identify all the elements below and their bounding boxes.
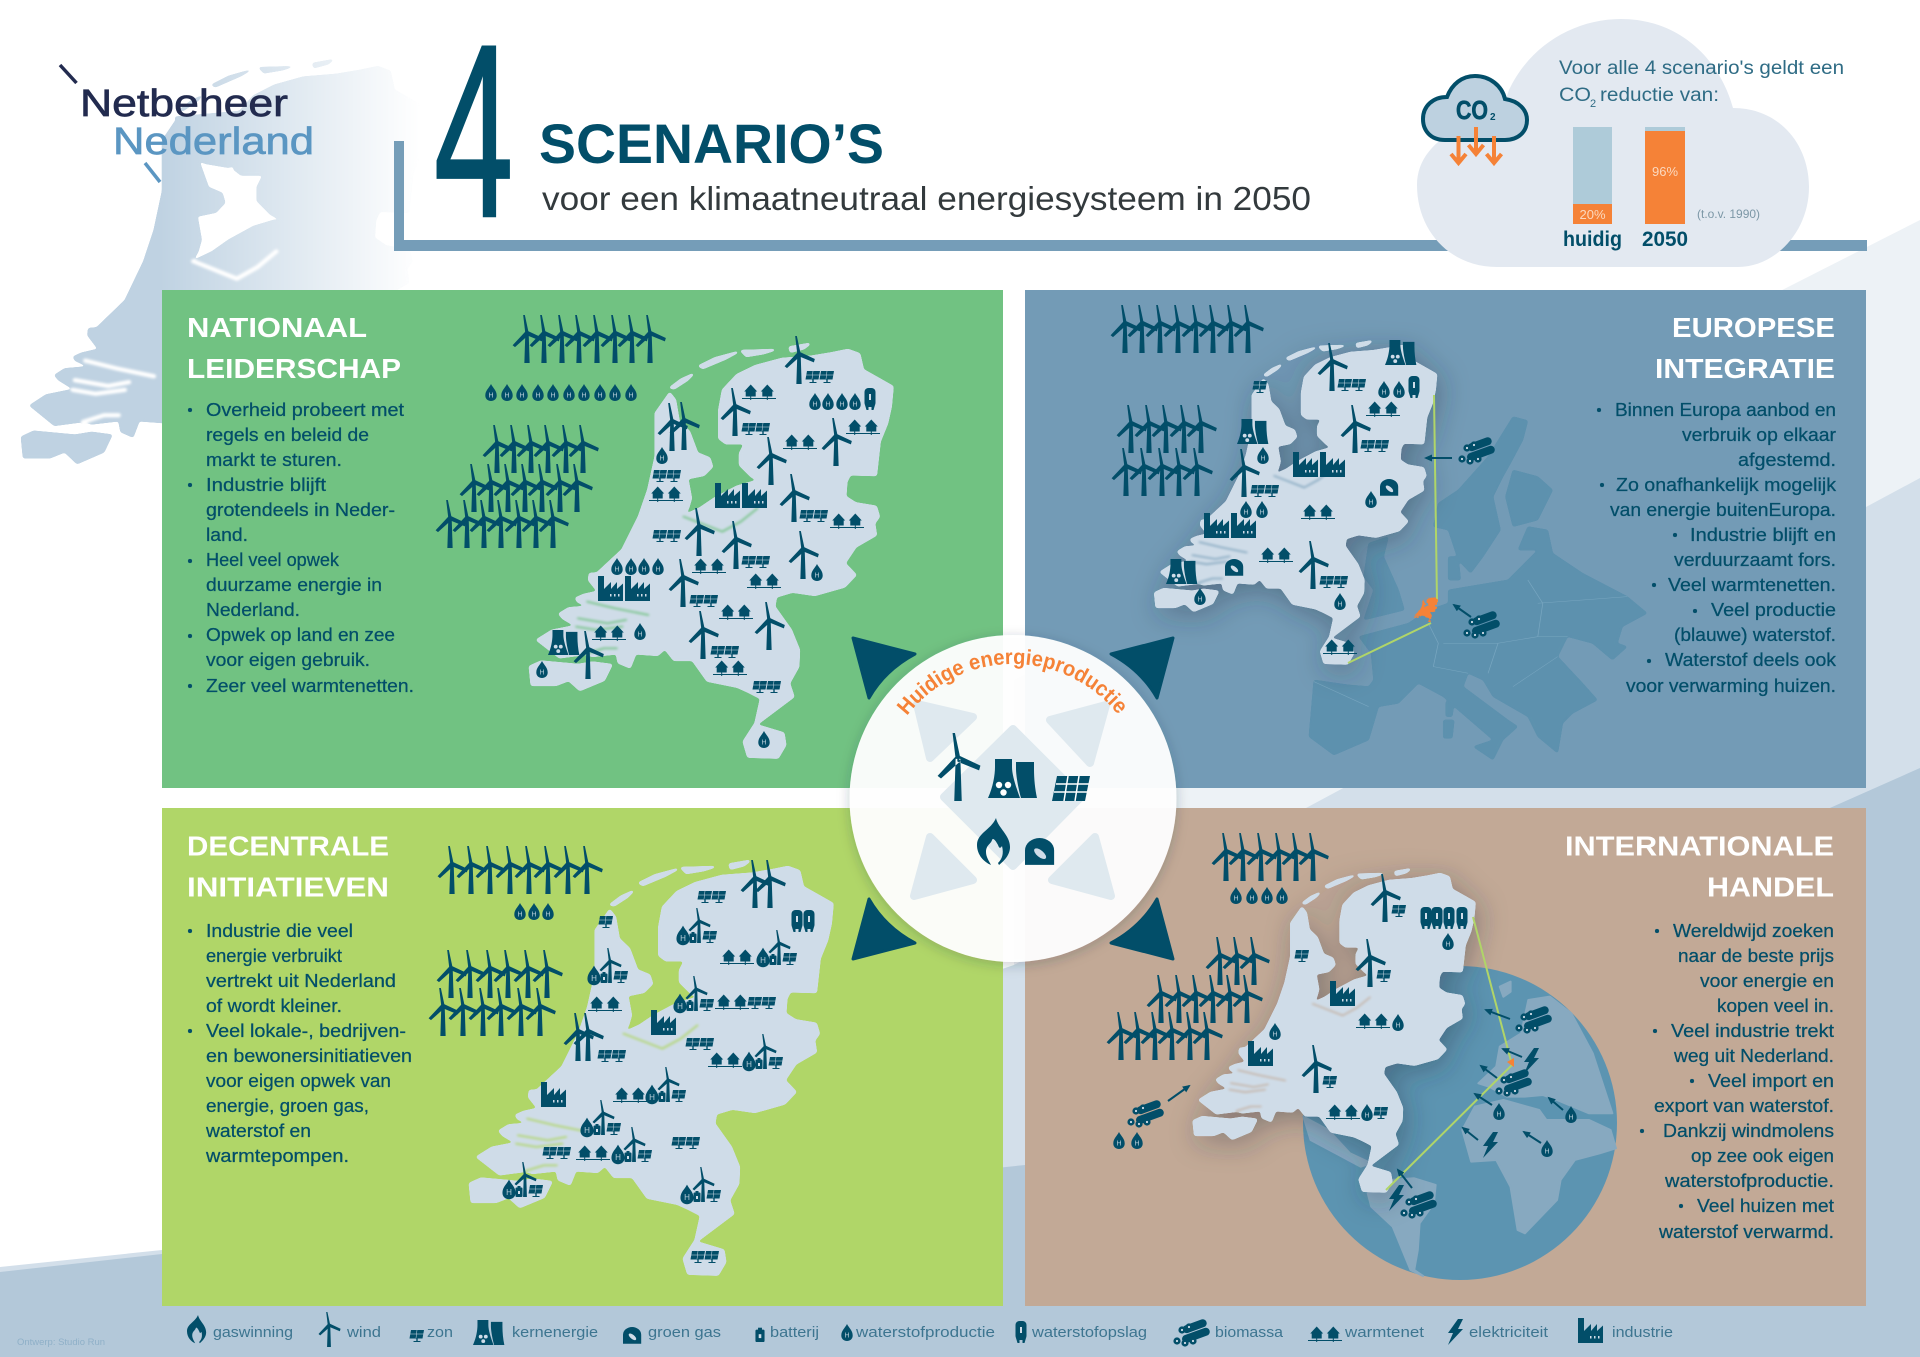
bullet list: verbruik op elkaar <box>1682 424 1836 445</box>
heading: INTERNATIONALE <box>1565 830 1834 862</box>
bullet list: export van waterstof. <box>1654 1095 1834 1116</box>
callout text: reductie van: <box>1600 85 1719 106</box>
icon: CO2 cloud with arrows: 2 <box>1490 112 1496 123</box>
bullet list: Veel lokale-, bedrijven- <box>206 1020 406 1041</box>
bullet list: Opwek op land en zee <box>206 624 395 645</box>
bullet list: Industrie blijft en <box>1690 524 1836 545</box>
interconnection lines and Netherlands marker <box>1348 395 1438 663</box>
heading <box>1565 830 1834 902</box>
legend: industrie: industrie <box>1612 1324 1673 1341</box>
corner arrows pointing to scenarios <box>853 638 1173 959</box>
legend: batterij <box>755 1324 819 1342</box>
offshore wind turbines <box>436 315 666 548</box>
bullet list <box>1597 399 1837 696</box>
bullet list: energie verbruikt <box>206 945 342 966</box>
bullet list: of wordt kleiner. <box>206 995 342 1016</box>
bullet list: Veel import en <box>1708 1070 1834 1091</box>
country borders <box>1314 580 1627 707</box>
bullet list: voor eigen gebruik. <box>206 649 370 670</box>
title: 4 <box>434 0 513 269</box>
map of Europe <box>1309 417 1647 760</box>
bar chart: CO2 reduction: 20% <box>1579 207 1606 222</box>
bullet list: verduurzaamt fors. <box>1674 549 1836 570</box>
bullet list: vertrekt uit Nederland <box>206 970 396 991</box>
bullet list: Veel industrie trekt <box>1671 1020 1834 1041</box>
heading <box>187 312 401 384</box>
panel: Internationale Handel <box>1025 808 1866 1306</box>
legend: waterstofopslag: waterstofopslag <box>1031 1324 1147 1341</box>
legend: zon: zon <box>427 1324 453 1341</box>
logo: Netbeheer Nederland: Netbeheer <box>80 83 288 125</box>
bullet list: naar de beste prijs <box>1678 945 1834 966</box>
bullet list: voor eigen opwek van <box>206 1070 391 1091</box>
heading: INTEGRATIE <box>1655 353 1835 384</box>
curved title: Huidige energieproductie <box>896 649 1125 715</box>
imports: biomass, electricity, hydrogen with arrows <box>1113 1005 1577 1219</box>
bullet list: voor verwarming huizen. <box>1626 675 1836 696</box>
map of the Netherlands <box>470 861 832 1275</box>
legend: waterstofproductie: waterstofproductie <box>855 1324 995 1341</box>
bullet list: op zee ook eigen <box>1691 1145 1834 1166</box>
panel: Europese Integratie <box>1025 290 1866 788</box>
legend: groen gas: groen gas <box>648 1324 721 1341</box>
bullet list: afgestemd. <box>1738 449 1836 470</box>
bullet list: regels en beleid de <box>206 424 369 445</box>
heading <box>187 830 389 902</box>
map of the Netherlands <box>1155 341 1436 664</box>
bullet list: duurzame energie in <box>206 574 382 595</box>
CO2 reduction cloud callout <box>1417 19 1844 267</box>
bullet list: Veel warmtenetten. <box>1668 574 1836 595</box>
legend: gaswinning <box>187 1315 293 1343</box>
legend: wind <box>318 1312 381 1347</box>
offshore wind turbines <box>1111 305 1264 496</box>
bar chart: CO2 reduction: 2050 <box>1642 228 1688 251</box>
map icons <box>1166 340 1420 655</box>
title <box>434 0 1311 269</box>
bullet list: weg uit Nederland. <box>1673 1045 1834 1066</box>
title frame bar <box>394 141 1867 251</box>
bullet list: Heel veel opwek <box>206 549 340 570</box>
callout text: 2 <box>1590 98 1596 110</box>
bullet list: Zeer veel warmtenetten. <box>206 675 414 696</box>
bullet list: kopen veel in. <box>1717 995 1834 1016</box>
offshore hydrogen drops <box>485 384 637 401</box>
map icons <box>502 860 814 1263</box>
map of the Netherlands <box>530 344 892 758</box>
legend: kernenergie: kernenergie <box>512 1324 598 1341</box>
legend: gaswinning: gaswinning <box>213 1324 293 1341</box>
heading: HANDEL <box>1707 872 1834 902</box>
logo: Netbeheer Nederland <box>60 65 314 182</box>
bullet list: (blauwe) waterstof. <box>1674 624 1836 645</box>
bullet list: Waterstof deels ook <box>1665 649 1837 670</box>
bullet list: Veel productie <box>1711 599 1836 620</box>
globe <box>1303 966 1617 1280</box>
bar chart: CO2 reduction <box>1563 127 1760 251</box>
offshore wind turbines and drops <box>1107 833 1329 1060</box>
interconnection lines and marker <box>1386 917 1514 1190</box>
pale arrows and diamond <box>914 704 1111 896</box>
bullet list <box>188 920 412 1166</box>
callout text <box>1559 58 1844 110</box>
bar chart: CO2 reduction: huidig <box>1563 228 1622 251</box>
legend: biomassa: biomassa <box>1215 1324 1284 1341</box>
heading: LEIDERSCHAP <box>187 353 401 384</box>
legend: biomassa <box>1173 1318 1284 1347</box>
legend: zon <box>410 1324 453 1342</box>
bullet list: en bewonersinitiatieven <box>206 1045 412 1066</box>
bullet list: van energie buitenEuropa. <box>1610 499 1836 520</box>
heading: NATIONAAL <box>187 312 367 343</box>
bullet list: waterstof en <box>205 1120 311 1141</box>
legend: elektriciteit <box>1448 1319 1549 1345</box>
bullet list: Zo onafhankelijk mogelijk <box>1616 474 1837 495</box>
bullet list: Binnen Europa aanbod en <box>1615 399 1836 420</box>
bullet list: Wereldwijd zoeken <box>1673 920 1834 941</box>
panel: Nationaal Leiderschap <box>162 290 1003 788</box>
bullet list: land. <box>206 524 248 545</box>
legend: wind: wind <box>346 1324 381 1341</box>
legend: groen gas <box>623 1324 721 1344</box>
faded map of the Netherlands behind logo <box>21 59 428 543</box>
legend: warmtenet: warmtenet <box>1344 1324 1425 1341</box>
bullet list: Nederland. <box>206 599 300 620</box>
centre circle: Huidige energieproductie <box>843 632 1183 971</box>
legend: elektriciteit: elektriciteit <box>1469 1324 1549 1341</box>
logo: Netbeheer Nederland: Nederland <box>113 121 314 163</box>
callout text: Voor alle 4 scenario's geldt een <box>1559 58 1844 79</box>
biomass imports <box>1426 436 1501 639</box>
legend: warmtenet <box>1308 1324 1425 1342</box>
heading: DECENTRALE <box>187 830 389 862</box>
map icons <box>1248 874 1468 1121</box>
panel: Decentrale Initiatieven <box>162 808 1003 1306</box>
legend <box>187 1312 1673 1347</box>
legend: kernenergie <box>473 1320 598 1345</box>
callout text: CO <box>1559 85 1591 106</box>
bullet list: energie, groen gas, <box>206 1095 369 1116</box>
bullet list: Dankzij windmolens <box>1663 1120 1834 1141</box>
bullet list: markt te sturen. <box>206 449 342 470</box>
bullet list: warmtepompen. <box>205 1145 349 1166</box>
heading <box>1655 312 1835 384</box>
bullet list: waterstofproductie. <box>1664 1170 1834 1191</box>
bullet list: grotendeels in Neder- <box>206 499 395 520</box>
bullet list: Industrie blijft <box>206 474 326 495</box>
bullet list <box>1640 920 1834 1242</box>
credit: Ontwerp: Studio Run <box>17 1337 105 1348</box>
map icons <box>536 336 880 748</box>
bar chart: CO2 reduction: (t.o.v. 1990) <box>1697 207 1760 221</box>
legend: waterstofopslag <box>1016 1321 1147 1343</box>
offshore wind turbines and drops <box>429 846 603 1036</box>
bar chart: CO2 reduction: 96% <box>1652 164 1678 179</box>
icon: CO2 cloud with arrows: CO <box>1456 95 1488 125</box>
icons: wind, nuclear, solar, flame, green gas <box>938 733 1090 865</box>
legend: industrie <box>1578 1318 1673 1343</box>
icon: CO2 cloud with arrows <box>1423 76 1527 163</box>
title: SCENARIO’S <box>539 112 884 175</box>
bullet list: waterstof verwarmd. <box>1658 1221 1834 1242</box>
bullet list <box>188 399 414 696</box>
title: voor een klimaatneutraal energiesysteem in 2050 <box>542 180 1311 217</box>
legend: batterij: batterij <box>770 1324 819 1341</box>
bullet list: Veel huizen met <box>1697 1195 1834 1216</box>
heading: EUROPESE <box>1672 312 1835 343</box>
map of the Netherlands <box>1193 869 1475 1192</box>
bullet list: Industrie die veel <box>206 920 353 941</box>
bullet list: Overheid probeert met <box>206 399 404 420</box>
heading: INITIATIEVEN <box>187 872 389 902</box>
bullet list: voor energie en <box>1700 970 1834 991</box>
